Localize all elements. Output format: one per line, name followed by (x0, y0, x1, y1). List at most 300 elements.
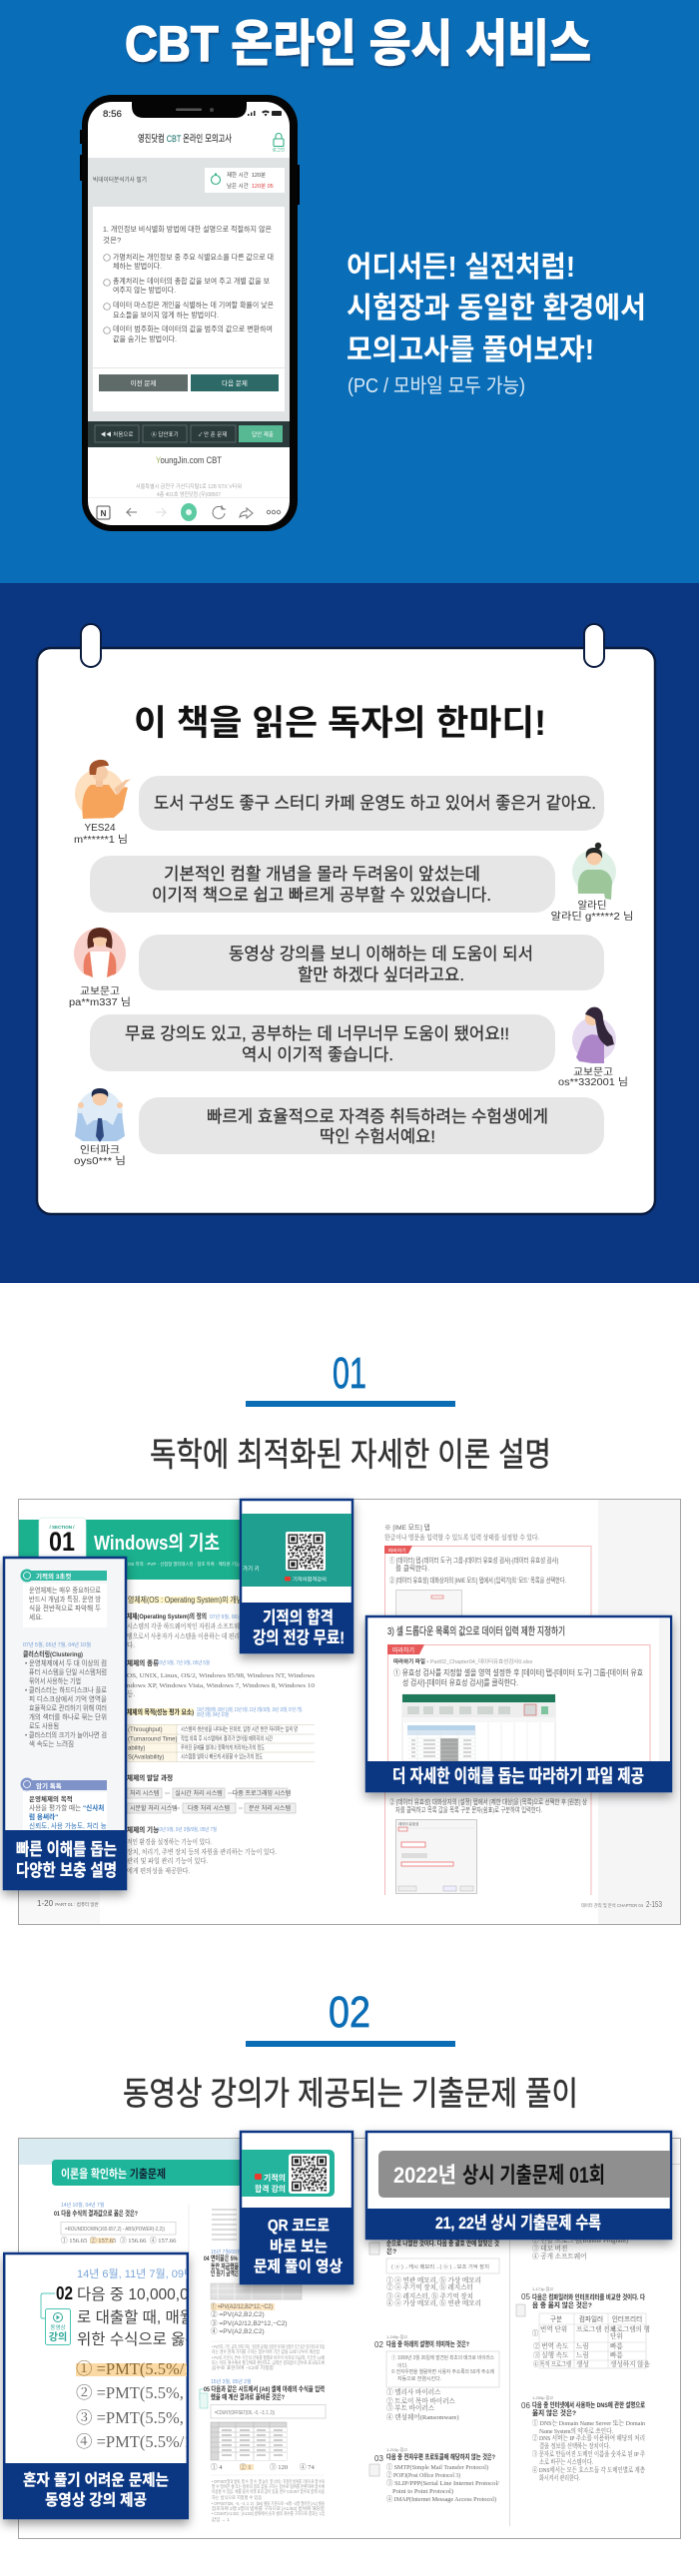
right column 2: 결을 정보를 선택하는 장치이다. (539, 2441, 610, 2450)
QR banner: 기적의 (264, 2173, 286, 2183)
zoomed question: ③ =PMT(5.5%, (76, 2408, 184, 2427)
practice text: ① 유효성 검사를 지정할 셀을 영역 설정한 후 [데이터] 탭-[데이터 도구] 그룹-[데이터 유효 (393, 1667, 643, 1677)
right column 1: ( ⓐ )→캐시 메모리→( ⓑ )→보조 기억 장치 (391, 2263, 489, 2270)
question 01: =ROUNDDOWN(165.657,2) - ABS(POWER(-2,2)) (65, 2227, 165, 2233)
review 3 bubble: 할만 하겠다 싶더라고요. (298, 966, 464, 984)
promo text (347, 251, 646, 397)
question panel: 체하는 방법이다. (113, 261, 162, 271)
page 1 body text: 다. (127, 1640, 135, 1649)
page 2 body text: ① [데이터] 탭-[데이터 도구] 그룹-[데이터 유효성 검사]-[데이터 유효성 검사] (389, 1556, 558, 1565)
right column 1: © 전자우편을 열람하면 사용자 주소록의 50개 주소에 (391, 2368, 494, 2375)
right column 2: 화시켜서 관리한다. (539, 2473, 580, 2482)
page 1 functions text: 장치, 처리기, 주변 장치 등의 자원을 관리하는 기능이 있다. (127, 1847, 277, 1856)
review 2 bubble: 이기적 책으로 쉽고 빠르게 공부할 수 있었습니다. (152, 886, 491, 905)
page 1 body text: 체제의 발달 과정 (127, 1773, 173, 1782)
phone mockup (80, 95, 300, 531)
compiler table: ④ 목적 프로그램 (533, 2359, 571, 2368)
zoomed question: ② =PMT(5.5%, (76, 2383, 184, 2402)
dialog screenshot (395, 1819, 477, 1893)
right column 1: ④ IMAP(Internet Message Access Protocol) (386, 2494, 496, 2503)
callout caption: QR 코드로 (268, 2218, 330, 2235)
avatar: Interpark reader: oys0*** 님 (74, 1155, 126, 1167)
question 01: 01 다음 수식의 결과값으로 옳은 것은? (54, 2209, 138, 2218)
avatar: Kyobo reader 1: 교보문고 (80, 985, 120, 997)
process flow (127, 1788, 296, 1813)
section 01 number: 01 (333, 1349, 366, 1398)
right column 1: 이다. (397, 2362, 408, 2369)
site footer: 4층 401호 영진닷컴 (우)08507 (157, 490, 221, 498)
avatar: YES24 reader (74, 760, 131, 846)
question 04: • PV의 기간이, 연수 기간의 단위를 월별로 바꾸어 이자의 지급액, 기간은 12배 (212, 2354, 325, 2361)
review 4 bubble: 역시 이기적 좋습니다. (242, 1045, 393, 1064)
question 05 options and notes: 하는 방식으로 지정할 수 있음 (212, 2494, 262, 2501)
avatar: Aladin reader: 알라딘 g*****2 님 (551, 911, 633, 923)
right column 2: 옳지 않은 것은? (532, 2408, 576, 2417)
zoomed question: 로 대출할 때, 매월 상환 (77, 2308, 227, 2326)
zoomed question: ④ =PMT(5.5%/12, (76, 2432, 205, 2451)
video lecture icon (41, 2293, 70, 2344)
callout caption (3, 2463, 189, 2519)
compiler table: ② 번역 속도 (533, 2341, 569, 2350)
avatar: Kyobo reader 2 (558, 1007, 628, 1088)
process flow: 시분할 처리 시스템 (130, 1804, 178, 1812)
zoomed question: ① =PMT(5.5%/12, (76, 2359, 205, 2378)
binder ring left (81, 624, 101, 667)
right column 1: 은? (386, 2248, 396, 2255)
tip header (20, 1570, 107, 1582)
right column 2: 다음은 컴파일러와 인터프리터를 비교한 것이다. 다 (532, 2292, 645, 2301)
review 4 bubble: 무료 강의도 있고, 공부하는 데 너무너무 도움이 됐어요!! (125, 1024, 509, 1043)
right column 2: ② DNS 서버는 IP 주소를 이용하여 해당의 처리 (532, 2433, 645, 2442)
clustering note: 클러스터링(Clustering) (23, 1649, 83, 1658)
question panel: 1. 개인정보 비식별화 방법에 대한 설명으로 적절하지 않은 (103, 224, 272, 234)
review 1 bubble: 도서 구성도 좋구 스터디 카페 운영도 하고 있어서 좋은거 같아요. (154, 794, 596, 813)
practice heading: 3) 셀 드롭다운 목록의 값으로 데이터 입력 제한 지정하기 (387, 1624, 565, 1637)
question 05: 15년 3월, 05년 2월 (211, 2378, 252, 2385)
right column 2: Name System의 약자로 쓰인다. (539, 2426, 613, 2435)
page 2 footer: 2-153 (646, 1900, 662, 1909)
callout caption (240, 1603, 353, 1652)
right column 2: 05 (521, 2292, 530, 2301)
page 2 body text: ② [데이터 유효성] 대화상자의 [IME 모드] 탭에서 [입력기]의 '모드' 목록을 선택한다. (389, 1576, 566, 1585)
dialog screenshot: 데이터 유효성 (398, 1821, 418, 1826)
lecture label: 기적의합격강의 (293, 1576, 327, 1584)
page 2 body text: ※ [IME 모드] 탭 (384, 1524, 430, 1532)
compiler table: 빠름 (610, 2341, 623, 2350)
callout caption: 빠른 이해를 돕는 (16, 1840, 117, 1859)
avatar: YES24 reader: YES24 (84, 823, 116, 834)
lecture label (285, 1576, 327, 1584)
question 05: 05 다음과 같은 시트에서 [A6] 셀에 아래의 수식을 입력 (204, 2384, 325, 2393)
right column 1: 1-210p 참고 (386, 2446, 407, 2452)
question panel: 요소들을 보이지 않게 하는 방법이다. (113, 310, 219, 320)
section 01 heading: 독학에 최적화된 자세한 이론 설명 (150, 1436, 551, 1473)
callout caption: 동영상 강의 제공 (45, 2491, 147, 2509)
page 1 body text: ability) (128, 1745, 145, 1751)
clustering note: 묶어서 사용하는 기법 (29, 1676, 81, 1685)
status bar (103, 110, 282, 118)
right column 1: ④ 랜섬웨어(Ransomware) (386, 2412, 459, 2421)
review 5 bubble (139, 1097, 604, 1154)
question 05 options and notes: • OFFSET(D6, −5, −3, 2, 2) : [D6] 셀을 기준으로 −5행 −3열 떨어진 [A1] 셀을 (212, 2500, 325, 2507)
compiler table: 느림 (576, 2341, 589, 2350)
browser bar (88, 497, 290, 521)
chapter banner (19, 1518, 240, 1580)
tool bar (88, 421, 290, 447)
QR banner (242, 2150, 335, 2197)
page 1 body text: OS, UNIX, Linux, OS/2, Windows 95/98, Windows NT, Windows (127, 1672, 315, 1679)
right column 1: ① 멜리사 바이러스 (386, 2387, 441, 2396)
exam title pill (378, 2151, 670, 2198)
tip header: 기적의 3초컷 (36, 1572, 71, 1581)
callout caption (240, 2208, 353, 2284)
exam title pill: 2022년 (393, 2163, 456, 2188)
exam area (88, 158, 290, 421)
browser bar: N (101, 509, 107, 518)
avatar: Kyobo reader 2: 교보문고 (573, 1066, 613, 1078)
tip text: 식을 전반적으로 파악해 두 (29, 1604, 101, 1612)
callout caption: 바로 보는 (270, 2238, 328, 2255)
page 2 body text: 자를 클릭하고 목록 값을 목록 구분 문자(쉼표)로 구분하여 입력한다. (395, 1805, 542, 1814)
right column 2: 06 (521, 2401, 530, 2410)
question 01: ② 157.65 (90, 2236, 117, 2245)
question 04: 04 연이율은 5% (204, 2254, 238, 2262)
excel screenshot (402, 1694, 555, 1761)
app header (138, 133, 285, 152)
question 05 options and notes: • COUNT(A1:B2) : [A1:B2] 범위에서 숫자 셀의 개수를 구하므로 결과는 1임 (212, 2510, 325, 2517)
right column 1: Point to Point Protocol) (392, 2488, 453, 2495)
callout: past exams included (365, 2132, 672, 2239)
question 01: ④ 157.66 (150, 2236, 177, 2245)
page 1 functions text: 10년 9월, 9년 3월/9월, 05년 7월 (157, 1826, 217, 1833)
section 02 number: 02 (329, 1988, 370, 2037)
compiler table: 번역 단위 (540, 2324, 567, 2333)
section background: blue CBT (0, 0, 699, 583)
clustering note: 개의 섹터를 하나로 묶는 단위 (29, 1712, 107, 1721)
zoomed question: 02 (56, 2283, 73, 2303)
question 05 options and notes: 참조하여 2행 2열의 범위를 구하므로 [A1:B2] 범위에 해당함 (212, 2505, 325, 2512)
page 1 functions text: 적인 환경을 설정하는 기능이 있다. (127, 1837, 212, 1846)
page 2 body text: 를 클릭한다. (395, 1564, 429, 1573)
question 05 options and notes: ① 4 (211, 2462, 223, 2471)
question 01: ① 156.65 (61, 2236, 88, 2245)
right column 1: 다음 중 전자우편 프로토콜에 해당하지 않는 것은? (386, 2452, 495, 2461)
review 3 bubble (139, 935, 604, 990)
tip text: 반드시 개념과 특징, 운영 방 (29, 1595, 101, 1604)
page 1 body text: 시스템의 생산성을 나타내는 단위로, 일정 시간 동안 처리하는 일의 양 (181, 1725, 298, 1733)
page 1 body text: 체제의 목적(성능 평가 요소) (127, 1707, 194, 1716)
compiler table: 프로그램의 행 (610, 2324, 650, 2333)
right column 1: ① ⓐ 연관 메모리, ⓑ 가상 메모리 (386, 2275, 481, 2284)
QR banner: 합격 강의 (255, 2184, 286, 2194)
app header: 영진닷컴 CBT 온라인 모의고사 (138, 133, 232, 145)
question 05 options and notes: ④ 74 (300, 2462, 316, 2471)
memo header (20, 1777, 107, 1791)
question 05 options and notes: ③ 120 (270, 2462, 289, 2471)
tip text: 세요. (29, 1612, 43, 1621)
right column 1: ② ⓐ 주기억 장치, ⓑ 레지스터 (386, 2282, 473, 2291)
question panel: 데이터 마스킹은 개인을 식별하는 데 기여할 확률이 낮은 (113, 300, 274, 310)
site footer (136, 455, 242, 498)
page 1 functions text: 체제의 기능 (127, 1825, 159, 1834)
callout: practice files (365, 1616, 672, 1792)
page 1 body text (127, 1595, 316, 1782)
question 05 options and notes: ② 1 (240, 2462, 252, 2471)
clustering note: 퓨터 시스템을 단일 시스템처럼 (29, 1667, 107, 1676)
question panel: 여주지 않는 방법이다. (113, 285, 176, 295)
page 2 footer (581, 1900, 662, 1909)
tip text: 운영체제는 매우 중요하므로 (29, 1586, 101, 1595)
avatar: Aladin reader (551, 843, 633, 923)
page 1 body text: 시스템의 각종 하드웨어적인 자원과 소프트웨 (127, 1621, 240, 1630)
page 1 footer: 1-20 PART 01 : 컴퓨터 일반 (37, 1899, 99, 1908)
clustering note: • 클러스터의 크기가 늘어나면 검 (25, 1730, 107, 1739)
clustering note: 07년 5월, 05년 7월, 04년 10월 (23, 1641, 91, 1648)
panel: book spread 02 (18, 2139, 681, 2538)
review 3 bubble: 동영상 강의를 보니 이해하는 데 도움이 되서 (229, 945, 533, 964)
question panel: 것은? (103, 235, 121, 245)
question 04: ③ =PV(A2/12,B2*12,−C2) (211, 2319, 288, 2327)
question 01: 14년 10월, 04년 7월 (61, 2202, 105, 2209)
page 1 functions text: 관리 및 파일 관리 기능이 있다. (127, 1856, 208, 1865)
callout caption: 강의 전강 무료! (253, 1628, 345, 1647)
button: next (191, 374, 279, 391)
question 01 (54, 2202, 189, 2254)
callout caption (365, 1761, 672, 1792)
page 1 body text: 07년 9월, 06년 (210, 1613, 242, 1620)
right column 2: 다음 중 인터넷에서 사용하는 DNS에 관한 설명으로 (532, 2400, 645, 2409)
question 04: ② =PV(A2,B2,C2) (211, 2310, 265, 2318)
avatar: YES24 reader: m******1 님 (74, 834, 128, 846)
exam title pill: 상시 기출문제 01회 (462, 2163, 605, 2188)
right column 2: 소로 바꾸는 시스템이다. (539, 2457, 593, 2466)
review 1 bubble (139, 776, 604, 831)
right column 1: 1-249p 참고 (386, 2333, 407, 2339)
right column 2: 음 중 옳지 않은 것은? (532, 2300, 592, 2309)
question 04: 인 원기 금액은 (211, 2268, 239, 2277)
title: CBT 온라인 응시 서비스 (125, 16, 591, 72)
callout caption: 다양한 보충 설명 (16, 1861, 117, 1880)
zoomed question: 다음 중 10,000,000원 (77, 2285, 220, 2303)
practice text (393, 1657, 643, 1687)
button: previous: 이전 문제 (131, 378, 156, 387)
right column 1: ③ SLIP/PPP(Serial Line Internet Protocol/ (386, 2478, 499, 2487)
compiler table: 프로그램 전체 (576, 2324, 616, 2333)
mini table (211, 2422, 287, 2460)
question 04: 동안 저금했을 (211, 2261, 239, 2270)
button: next: 다음 문제 (222, 378, 248, 387)
memo text: 사용을 평가할 때는 "신사처 (29, 1803, 104, 1812)
process flow: 다중 처리 시스템 (188, 1804, 230, 1812)
status bar: 8:56 (103, 109, 122, 119)
process flow: 다중 프로그래밍 시스템 (233, 1789, 291, 1797)
chapter banner: / SECTION / (49, 1525, 75, 1530)
tool bar: Ⓐ 답안표기 (151, 430, 179, 438)
tool bar: 답안 제출 (252, 430, 274, 438)
app header: 로그인 (273, 146, 285, 152)
callout: video lecture (0, 2251, 196, 2531)
clustering note: 피 디스크상에서 기억 영역을 (29, 1694, 107, 1703)
timer box (205, 168, 285, 193)
chapter banner: Windows의 기초 (94, 1532, 220, 1555)
practice text: 따라하기 파일 • Part02_Chapter04_데이터유효성검사0.xlsx (393, 1657, 533, 1665)
clustering note: • 클러스터는 하드디스크나 플로 (25, 1685, 107, 1694)
reviews heading: 이 책을 읽은 독자의 한마디! (134, 704, 546, 743)
compiler table: ③ 실행 속도 (533, 2350, 569, 2359)
right column 1: 자동으로 전염시킨다. (397, 2375, 441, 2382)
review 2 bubble: 기본적인 컴활 개념을 몰라 두려움이 앞섰는데 (164, 865, 480, 884)
process flow: 분산 처리 시스템 (249, 1804, 291, 1812)
timer box: 남은 시간 120분 05 (227, 182, 274, 190)
question 01: ③ 156.66 (120, 2236, 147, 2245)
right column 2: 1-171p 참고 (532, 2285, 553, 2291)
clustering note: 색 속도는 느려짐 (29, 1739, 74, 1748)
question 05 options and notes: • OFFSET(열의 범위, 행 수, 열 수, 행 높이, 열 너비) : 지정한 범위를 기준으로 행 수와 (212, 2478, 325, 2485)
page 2 body text: 따라하기 (388, 1548, 406, 1554)
section background: navy reviews (0, 583, 699, 1283)
memo text: 신뢰도, 사용 가능도, 처리 능 (29, 1821, 107, 1830)
question 05 (200, 2378, 326, 2418)
page 2 footer: 데이터 관리 및 분석 CHAPTER 04 (581, 1902, 643, 1909)
avatar: Kyobo reader 1: pa**m337 님 (69, 996, 131, 1008)
video lecture icon: 동영상 (50, 2323, 66, 2331)
question 04: • PV(이자, 기간, 금액, 현재 가치) : 일정한 금액을 일정한 이자와 일정한 기간 동안 정기적으로 적립 (212, 2343, 325, 2350)
right column 2 (516, 2236, 650, 2482)
page 1 body text: 체제의 종류 (127, 1658, 159, 1667)
right column 1: 순으로 나열한 것이다. 다음 중 괄호 안에 알맞은 것 (386, 2239, 499, 2248)
compiler table: 인터프리터 (612, 2314, 642, 2323)
practice text: 성 검사]-[데이터 유효성 검사]를 클릭한다. (402, 1677, 518, 1687)
promo subtext: (PC / 모바일 모두 가능) (348, 374, 525, 397)
phone notch (132, 102, 247, 118)
avatar: Kyobo reader 1 (69, 928, 131, 1008)
page 1 body text: ndows XP, Windows Vista, Windows 7, Windows 8, Windows 10 (127, 1682, 316, 1689)
QR code (286, 1532, 326, 1571)
avatar: Interpark reader (74, 1088, 126, 1167)
callout caption (365, 2209, 672, 2239)
compiler table: 생성하지 않음 (610, 2359, 650, 2368)
right column 2: ④ DNS에서는 모든 호스트들 각 도메인별로 계층 (532, 2465, 646, 2474)
question panel (93, 207, 285, 411)
page 1 body text: 램으로서 사용자가 시스템을 이용하는 데 편리 (127, 1631, 240, 1640)
question panel: 데이터 범주화는 데이터의 값을 범주의 값으로 변환하여 (113, 323, 273, 333)
right column 1: 03 (374, 2454, 383, 2463)
review 5 bubble: 딱인 수험서예요! (320, 1127, 435, 1146)
review 2 bubble (90, 856, 555, 913)
page 2 body text: ② [데이터 유효성] 대화상자의 [설정] 탭에서 [제한 대상]을 [목록]으로 선택한 후 [원본] 상 (389, 1797, 587, 1806)
right column 1: ③ 부트 바이러스 (386, 2403, 435, 2412)
compiler table: 빠름 (610, 2350, 623, 2359)
question 05: =COUNT(OFFSET(D6, −5, −3, 2, 2)) (215, 2410, 275, 2416)
zoomed question (56, 2268, 187, 2451)
site footer: 서울특별시 금천구 가산디지털1로 128 STX V타워 (136, 482, 242, 490)
memo text: 럼 용써라" (29, 1812, 58, 1821)
question panel: 값을 숨기는 방법이다. (113, 333, 177, 343)
question 05 options and notes (211, 2462, 325, 2523)
clustering note: 효율적으로 관리하기 위해 여러 (29, 1703, 107, 1712)
callout caption: 문제 풀이 영상 (254, 2257, 343, 2275)
page 2 body text (384, 1524, 591, 1895)
tool bar: ◀◀ 처음으로 (101, 430, 133, 438)
avatar: Aladin reader: 알라딘 (577, 900, 607, 912)
page 1 body text: 작업 의뢰 후 시스템에서 결과가 얻어질 때까지의 시간 (181, 1735, 273, 1743)
page 1 body text: 등. (127, 1690, 135, 1698)
callout: supplementary notes (3, 1558, 127, 1890)
panel: reader reviews (37, 624, 655, 1214)
right column 2: ④ 공개 소프트웨어 (532, 2252, 586, 2260)
promo text: 어디서든! 실전처럼! (347, 251, 575, 284)
chapter banner: OS 목적 · PVP · 선점형 멀티태스킹 · 참조 목록 · 메타윈 기능 (128, 1561, 240, 1568)
right column 1: 다음 중 아래의 설명이 의미하는 것은? (386, 2339, 469, 2348)
practice tag: 따라하기 (392, 1646, 414, 1654)
avatar: Interpark reader: 인터파크 (80, 1144, 120, 1156)
promo text: 모의고사를 풀어보자! (347, 333, 594, 366)
right column 2: ② 번들 프로그램(Bundle Program) (532, 2236, 628, 2245)
memo text: 운영체제의 목적 (29, 1794, 73, 1803)
question panel: 가명처리는 개인정보 중 주요 식별요소를 다른 값으로 대 (113, 252, 274, 262)
callout caption: 더 자세한 이해를 돕는 따라하기 파일 제공 (392, 1766, 644, 1786)
section 02 bar (246, 2041, 455, 2047)
banner: past exam (52, 2160, 246, 2186)
panel: book spread 01 (18, 1500, 681, 1925)
review 5 bubble: 빠르게 효율적으로 자격증 취득하려는 수험생에게 (207, 1107, 548, 1126)
compiler table: 단위 (610, 2331, 623, 2340)
compiler table: 컴파일러 (579, 2314, 603, 2323)
question 04: ① =PV(A2/12,B2*12,−C2) (211, 2302, 273, 2310)
page 1 body text: (Throughput) (128, 1727, 163, 1733)
page 1 functions text: 에게 편의성을 제공한다. (127, 1866, 190, 1875)
zoomed question: 14년 6월, 11년 7월, 09년 4월 (77, 2267, 213, 2280)
right column 1: ① 1999년 3월 26일에 발견된 최초의 매크로 바이러스 (391, 2354, 494, 2361)
section 02 heading: 동영상 강의가 제공되는 기출문제 풀이 (123, 2075, 578, 2112)
promo text: 시험장과 동일한 환경에서 (347, 292, 646, 324)
timer box: 제한 시간 120분 (227, 171, 266, 179)
section 01 bar (246, 1401, 455, 1407)
compiler table: 느림 (576, 2350, 589, 2359)
review 4 bubble (90, 1014, 555, 1071)
page 1 body text: 10년 9월, 7년 9월, 05년 5월 (157, 1659, 210, 1666)
right column 1: ② POP3(Post Office Protocol 3) (386, 2470, 460, 2479)
site footer: YoungJin.com CBT (156, 455, 222, 466)
binder ring right (584, 624, 604, 667)
clustering note: • 운영체제에서 두 대 이상의 컴 (25, 1658, 107, 1667)
right column 1: ④ ⓐ 가상 메모리, ⓑ 연관 메모리 (386, 2298, 481, 2307)
chapter banner: 01 (49, 1527, 75, 1557)
compiler table: ① (532, 2328, 539, 2337)
right column 1: ① SMTP(Simple Mail Transfer Protocol) (386, 2462, 488, 2471)
callout: QR solution video (240, 2132, 353, 2284)
button: previous (99, 374, 188, 391)
question panel: 총계처리는 데이터의 총합 값을 보여 주고 개별 값을 보 (113, 276, 270, 286)
right column 1 (369, 2239, 509, 2526)
banner: past exam: 이론을 확인하는 기출문제 (61, 2167, 166, 2181)
right column 1: 02 (374, 2340, 383, 2349)
page 1 body text: 05년 9월, 04년 10월 (197, 1711, 229, 1718)
page 1 body text: 체제(Operating System)의 정의 (127, 1611, 207, 1620)
clustering note: 로도 사용됨 (29, 1721, 59, 1730)
tip text (23, 1584, 107, 1627)
clustering note (23, 1641, 107, 1748)
compiler table: 생성 (576, 2359, 589, 2368)
practice tag (387, 1644, 424, 1654)
page 2 body text: 한글이나 영문을 입력할 수 있도록 입력 상태를 설정할 수 있다. (384, 1533, 539, 1542)
callout: free lecture QR (240, 1500, 353, 1652)
callout caption: 기적의 합격 (263, 1609, 334, 1627)
question 04: 또는 이자, 횟수에서 월 단위로 환산하고, 금액은 결과값이 양수로 표시되도록 (212, 2359, 325, 2366)
question 04: ④ =PV(A2,B2,C2) (211, 2327, 265, 2335)
process flow: 실시간 처리 시스템 (175, 1789, 223, 1797)
callout caption: 혼자 풀기 어려운 문제는 (23, 2471, 169, 2489)
